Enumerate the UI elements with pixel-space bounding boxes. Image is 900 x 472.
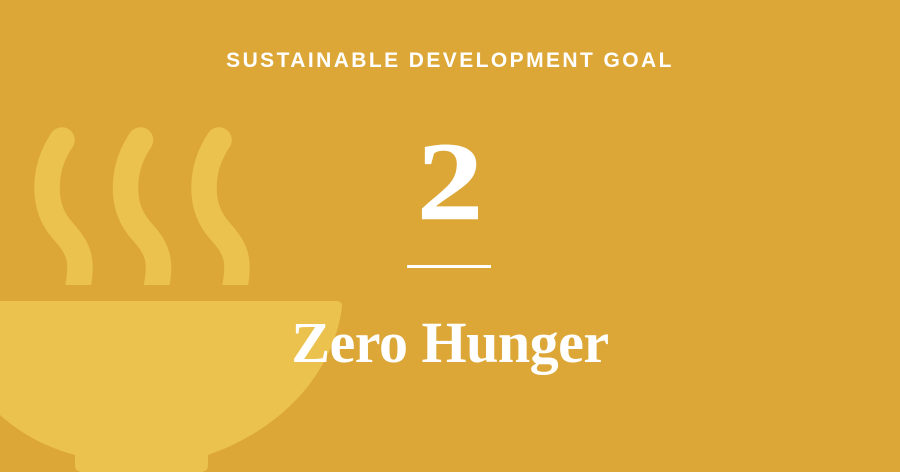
divider rule — [407, 265, 491, 268]
icon: steaming bowl — [0, 127, 342, 472]
heading: sustainable development goal: SUSTAINABLE DEVELOPMENT GOAL — [226, 49, 674, 72]
icon: steam wisps — [47, 140, 237, 292]
icon: bowl — [0, 301, 342, 472]
goal name: Zero Hunger — [291, 310, 609, 375]
goal number: 2 — [417, 120, 483, 244]
